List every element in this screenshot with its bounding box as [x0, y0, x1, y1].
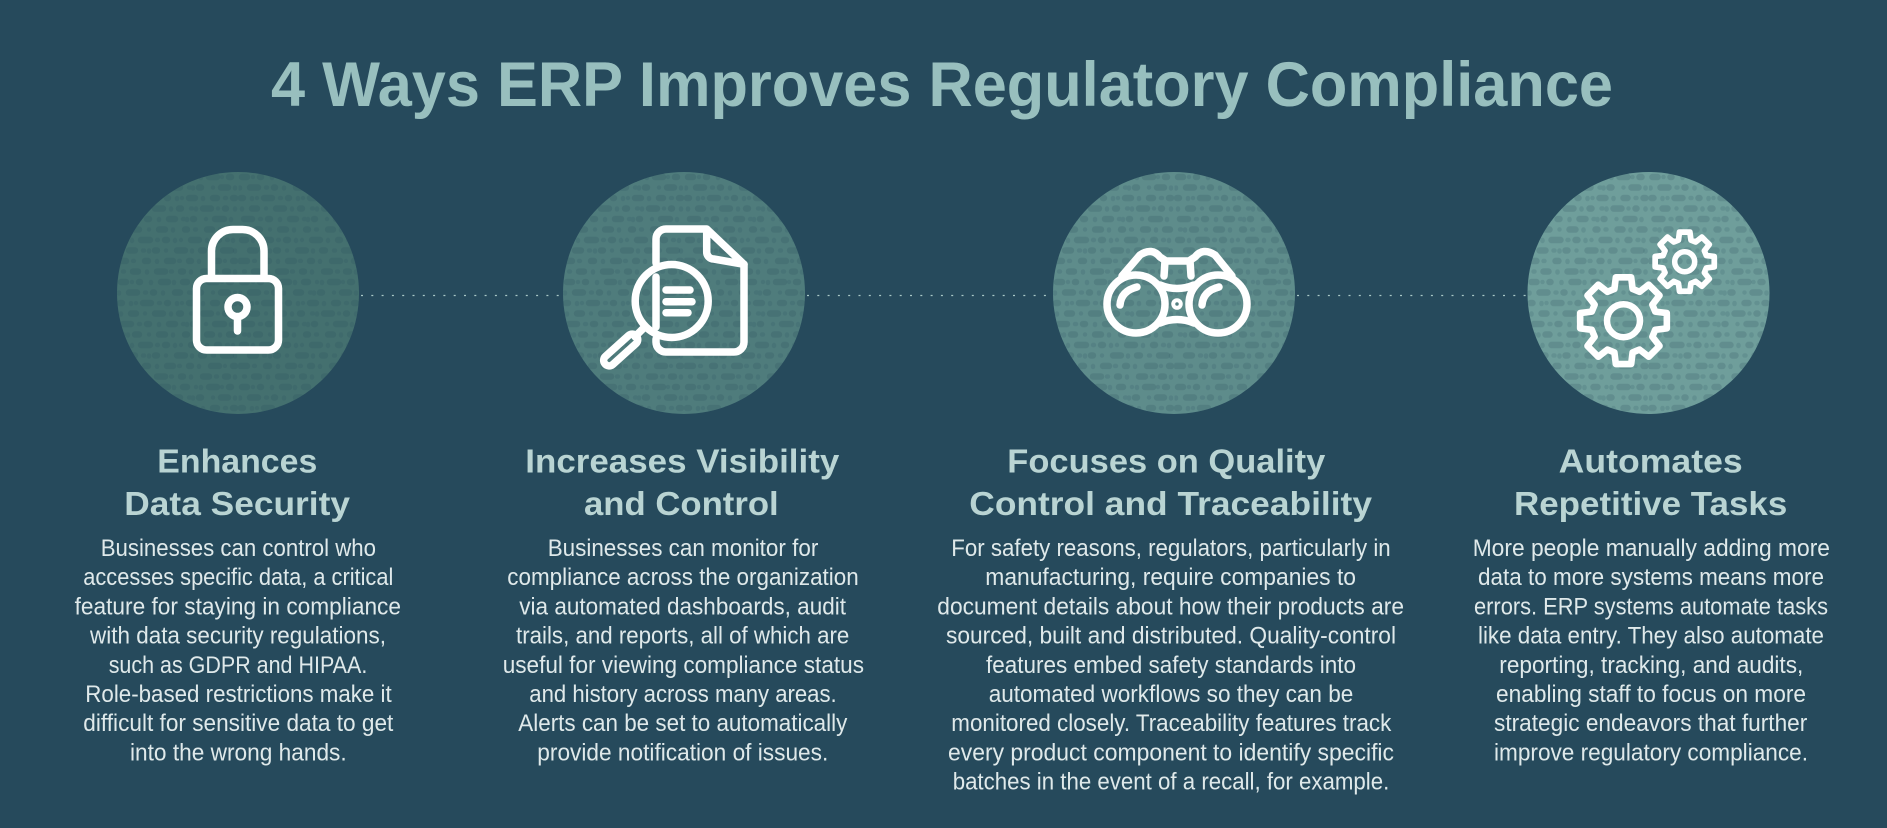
heading: increases visibility and control: Increases Visibility	[525, 443, 840, 480]
text block: increases visibility and control: trails, and reports, all of which are	[516, 623, 849, 650]
text block: focuses on quality control and traceability: sourced, built and distributed. Quality-control	[946, 623, 1396, 650]
connector: circle 3 to circle 4	[1297, 294, 1527, 296]
text block: automates repetitive tasks: strategic endeavors that further	[1494, 710, 1807, 737]
icon circle: gears	[1528, 172, 1770, 414]
text block: increases visibility and control: useful for viewing compliance status	[503, 652, 864, 679]
heading: enhances data security	[124, 443, 351, 522]
text block: increases visibility and control: via automated dashboards, audit	[519, 593, 846, 620]
heading: focuses on quality control and traceability: Control and Traceability	[969, 485, 1373, 522]
text block: enhances data security	[75, 535, 401, 766]
icon circle: binoculars	[1053, 172, 1295, 414]
heading: automates repetitive tasks	[1514, 443, 1787, 522]
heading: automates repetitive tasks: Repetitive Tasks	[1514, 485, 1787, 522]
text block: increases visibility and control: provide notification of issues.	[537, 739, 828, 766]
heading: increases visibility and control: and Control	[584, 485, 779, 522]
connector: circle 1 to circle 2	[361, 294, 562, 296]
text block: focuses on quality control and traceability: every product component to identify specific	[948, 739, 1394, 766]
icon: padlock	[196, 230, 278, 350]
title: 4 Ways ERP Improves Regulatory Compliance	[271, 50, 1613, 120]
text block: enhances data security: with data security regulations,	[89, 623, 386, 650]
text block: focuses on quality control and traceability: monitored closely. Traceability features track	[951, 710, 1392, 737]
text block: increases visibility and control	[503, 535, 864, 766]
heading: increases visibility and control	[525, 443, 840, 522]
text block: automates repetitive tasks: improve regulatory compliance.	[1494, 739, 1808, 766]
panel: focuses on quality control and traceability	[937, 172, 1404, 796]
text block: enhances data security: feature for staying in compliance	[75, 593, 401, 620]
text block: enhances data security: Businesses can control who	[101, 535, 376, 562]
text block: focuses on quality control and traceability: For safety reasons, regulators, particularly in	[951, 535, 1391, 562]
text block: focuses on quality control and traceability: features embed safety standards into	[986, 652, 1356, 679]
text block: automates repetitive tasks: reporting, tracking, and audits,	[1499, 652, 1803, 679]
heading: enhances data security: Enhances	[157, 443, 317, 480]
text block: increases visibility and control: and history across many areas.	[529, 681, 837, 708]
text block: enhances data security: into the wrong hands.	[130, 739, 347, 766]
text block: automates repetitive tasks: data to more systems means more	[1478, 564, 1824, 591]
text block: focuses on quality control and traceability: automated workflows so they can be	[989, 681, 1353, 708]
text block: enhances data security: difficult for sensitive data to get	[83, 710, 394, 737]
panel: enhances data security	[75, 172, 401, 766]
text block: focuses on quality control and traceability: document details about how their products are	[937, 593, 1404, 620]
text block: enhances data security: accesses specific data, a critical	[83, 564, 393, 591]
text block: increases visibility and control: Businesses can monitor for	[548, 535, 818, 562]
icon circle: document search	[563, 172, 805, 414]
icon: binoculars	[1107, 251, 1247, 333]
text block: focuses on quality control and traceability	[937, 535, 1404, 796]
icon: document with magnifying glass	[601, 229, 744, 368]
text block: automates repetitive tasks: errors. ERP systems automate tasks	[1474, 593, 1828, 620]
text block: increases visibility and control: Alerts can be set to automatically	[518, 710, 847, 737]
text block: focuses on quality control and traceability: batches in the event of a recall, for example.	[953, 769, 1389, 796]
panel: automates repetitive tasks	[1473, 172, 1830, 766]
heading: focuses on quality control and traceability	[969, 443, 1373, 522]
text block: enhances data security: such as GDPR and HIPAA.	[109, 652, 367, 679]
icon circle: lock	[117, 172, 359, 414]
text block: automates repetitive tasks: like data entry. They also automate	[1478, 623, 1824, 650]
heading: enhances data security: Data Security	[124, 485, 351, 522]
icon: gears	[1580, 232, 1714, 364]
heading: focuses on quality control and traceability: Focuses on Quality	[1007, 443, 1326, 480]
panel: increases visibility and control	[503, 172, 864, 766]
connector: circle 2 to circle 3	[807, 294, 1053, 296]
text block: enhances data security: Role-based restrictions make it	[85, 681, 392, 708]
heading: automates repetitive tasks: Automates	[1559, 443, 1743, 480]
text block: increases visibility and control: compliance across the organization	[507, 564, 859, 591]
text block: automates repetitive tasks: More people manually adding more	[1473, 535, 1830, 562]
text block: focuses on quality control and traceability: manufacturing, require companies to	[985, 564, 1356, 591]
text block: automates repetitive tasks	[1473, 535, 1830, 766]
text block: automates repetitive tasks: enabling staff to focus on more	[1496, 681, 1806, 708]
